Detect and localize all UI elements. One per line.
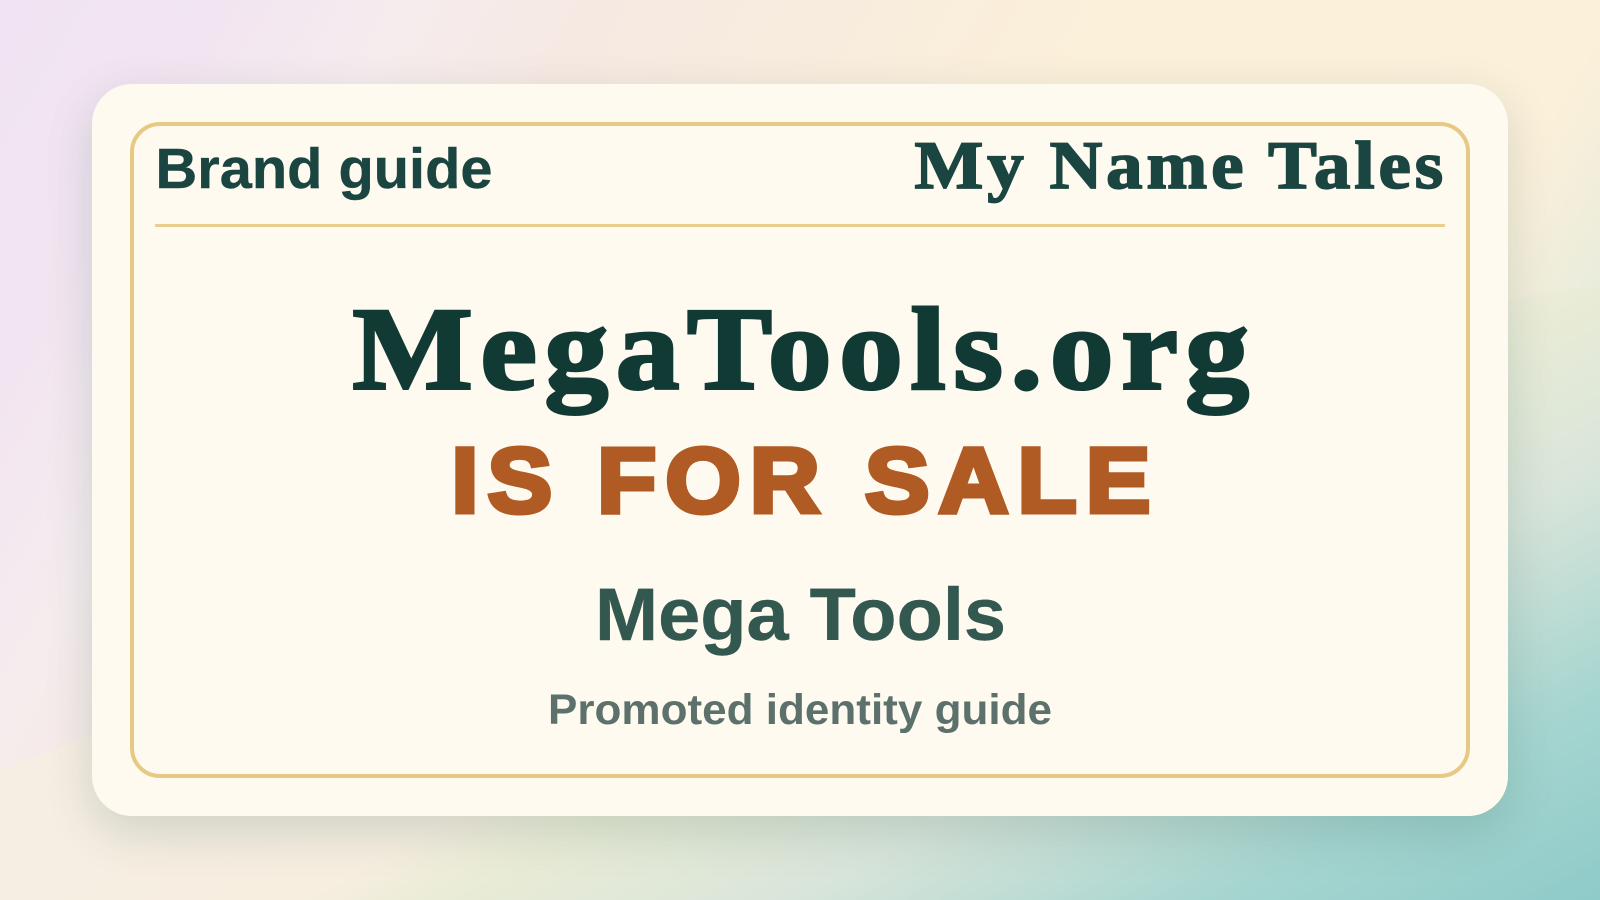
panel: sale card — [92, 84, 1508, 816]
heading: Brand guide: Brand guide — [156, 137, 492, 200]
brand name: My Name Tales: My Name Tales — [914, 128, 1447, 203]
domain title: MegaTools.org — [352, 284, 1257, 414]
brand subtitle: Mega Tools — [595, 573, 1006, 656]
header divider — [155, 224, 1445, 227]
caption: Promoted identity guide — [548, 686, 1052, 734]
sale headline: IS FOR SALE — [452, 429, 1160, 532]
card inner border — [130, 122, 1470, 778]
